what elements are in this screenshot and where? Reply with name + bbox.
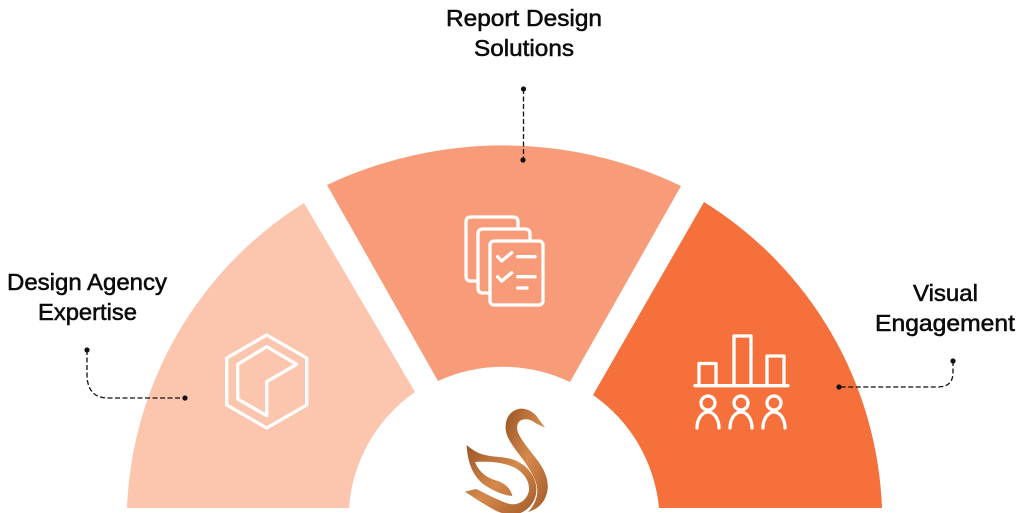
label: visual engagement: Engagement bbox=[875, 310, 1016, 336]
icon: hexagonal cube bbox=[227, 335, 307, 428]
label: report design solutions: Report Design bbox=[446, 5, 602, 31]
icon: bar chart with audience bbox=[695, 336, 788, 428]
label: visual engagement bbox=[875, 280, 1016, 336]
connector: top bbox=[520, 86, 526, 163]
label: visual engagement: Visual bbox=[913, 280, 978, 306]
panel: report design segment bbox=[327, 145, 681, 382]
label: design agency expertise: Design Agency bbox=[7, 269, 168, 295]
connector: right bbox=[836, 358, 956, 390]
connector: left bbox=[84, 347, 188, 401]
label: design agency expertise: Expertise bbox=[38, 299, 137, 325]
panel: visual engagement segment bbox=[593, 202, 882, 508]
label: report design solutions: Solutions bbox=[474, 35, 574, 61]
label: design agency expertise bbox=[7, 269, 168, 325]
icon: swan logo bbox=[465, 409, 548, 513]
icon: stacked checklist documents bbox=[466, 217, 543, 305]
label: report design solutions bbox=[446, 5, 602, 61]
panel: design agency segment bbox=[127, 203, 415, 508]
